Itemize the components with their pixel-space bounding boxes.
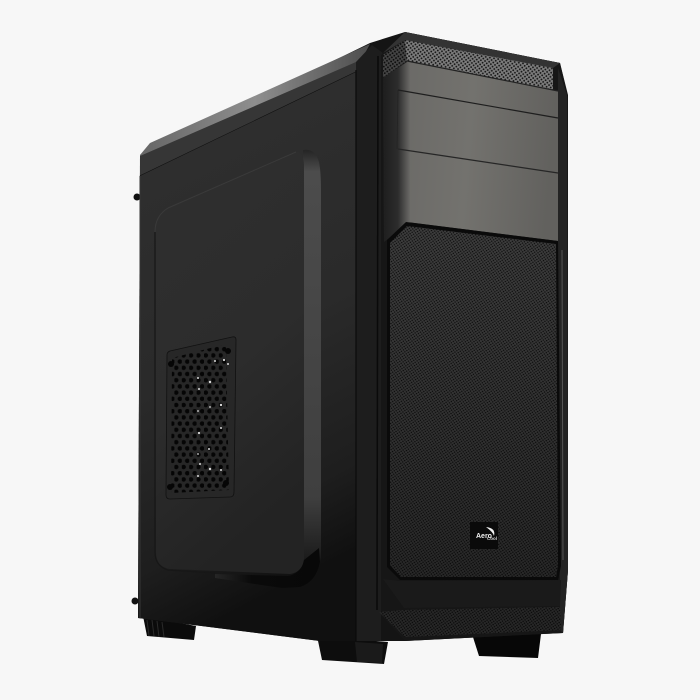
corner strip (356, 45, 383, 641)
logo badge: Cool (487, 536, 497, 541)
lower mesh strip (379, 607, 561, 637)
fan glints (197, 359, 229, 477)
vent grille (166, 337, 236, 499)
screws on rear edge (132, 194, 140, 604)
drive bays (383, 60, 558, 242)
top panel (140, 44, 370, 176)
logo badge (470, 522, 498, 549)
case body silhouette (138, 32, 568, 641)
lower band (383, 579, 561, 608)
top mesh vent (383, 40, 553, 90)
rear edge strip (139, 176, 141, 618)
front right edge (558, 68, 568, 633)
side panel raised ridge (296, 150, 321, 584)
feet (143, 616, 541, 664)
panel: side panel (138, 72, 356, 641)
main mesh panel (387, 222, 561, 580)
logo badge: Aero (476, 533, 492, 540)
panel: front panel (379, 32, 568, 641)
side panel bottom ridge shadow (215, 548, 320, 588)
side panel inset (156, 152, 304, 574)
grille screws (167, 348, 231, 490)
